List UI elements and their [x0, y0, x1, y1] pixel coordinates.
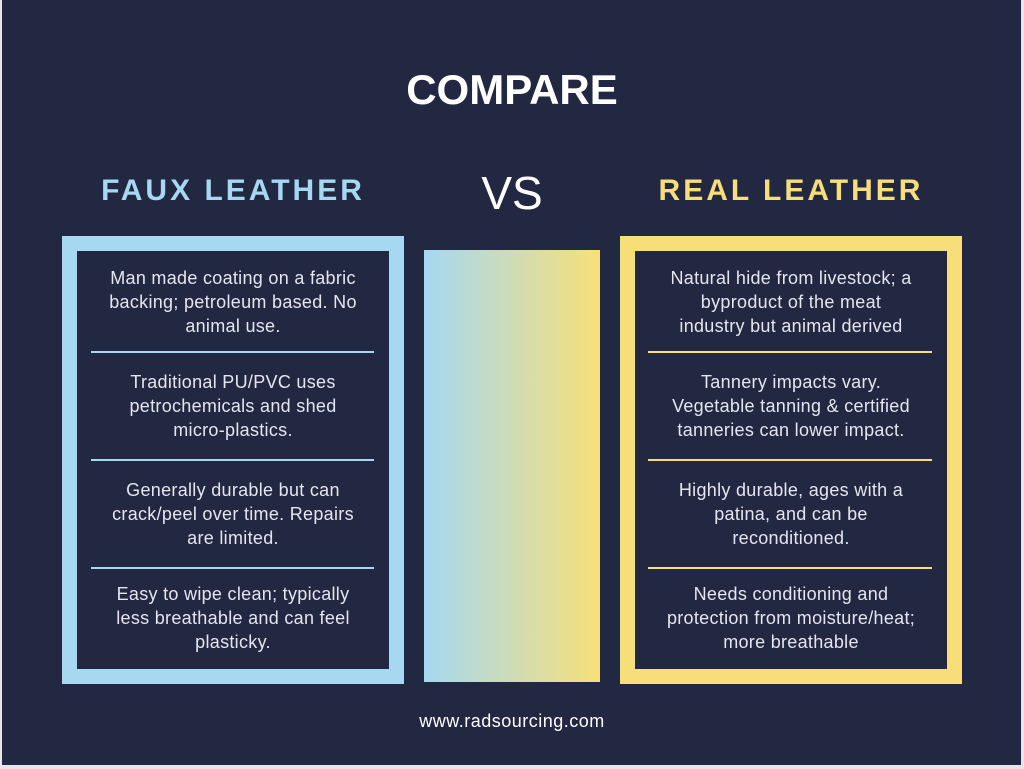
text: real environment: Tannery impacts vary. [701, 372, 881, 392]
text: real care [667, 584, 915, 652]
text: faux care: plasticky. [195, 632, 271, 652]
text: faux care: Easy to wipe clean; typically [117, 584, 349, 604]
text: real environment: Vegetable tanning & certified [672, 396, 910, 416]
text: faux environment: Traditional PU/PVC uses [130, 372, 336, 392]
text: faux durability: crack/peel over time. Repairs [112, 504, 354, 524]
heading: faux leather: FAUX LEATHER [101, 174, 365, 207]
text: real environment [672, 372, 910, 440]
text: faux care [116, 584, 350, 652]
text: real care: protection from moisture/heat; [667, 608, 915, 628]
text: real origin: byproduct of the meat [701, 292, 881, 312]
text: real durability: patina, and can be [714, 504, 868, 524]
text: faux origin: Man made coating on a fabric [110, 268, 356, 288]
text: real origin: industry but animal derived [679, 316, 903, 336]
title: COMPARE [406, 66, 618, 113]
text: faux care: less breathable and can feel [116, 608, 350, 628]
text: faux durability [112, 480, 354, 548]
text: real origin [670, 268, 912, 336]
heading: vs: VS [481, 167, 543, 219]
text: faux environment: petrochemicals and shed [129, 396, 337, 416]
text: real care: Needs conditioning and [694, 584, 888, 604]
panel: real leather [620, 236, 962, 684]
heading: real leather: REAL LEATHER [659, 174, 923, 207]
text: real durability: reconditioned. [732, 528, 850, 548]
text: faux origin [109, 268, 357, 336]
panel: faux leather [62, 236, 404, 684]
text: faux origin: backing; petroleum based. No [109, 292, 357, 312]
text: real durability: Highly durable, ages with a [679, 480, 903, 500]
text: real environment: tanneries can lower impact. [677, 420, 905, 440]
text: faux durability: are limited. [187, 528, 279, 548]
text: faux origin: animal use. [185, 316, 281, 336]
text: real origin: Natural hide from livestock; a [670, 268, 912, 288]
text: faux durability: Generally durable but can [126, 480, 340, 500]
footer url: www.radsourcing.com [419, 711, 605, 731]
text: real durability [679, 480, 903, 548]
text: faux environment [129, 372, 337, 440]
gradient bar [424, 250, 600, 682]
text: faux environment: micro-plastics. [173, 420, 293, 440]
text: real care: more breathable [723, 632, 859, 652]
